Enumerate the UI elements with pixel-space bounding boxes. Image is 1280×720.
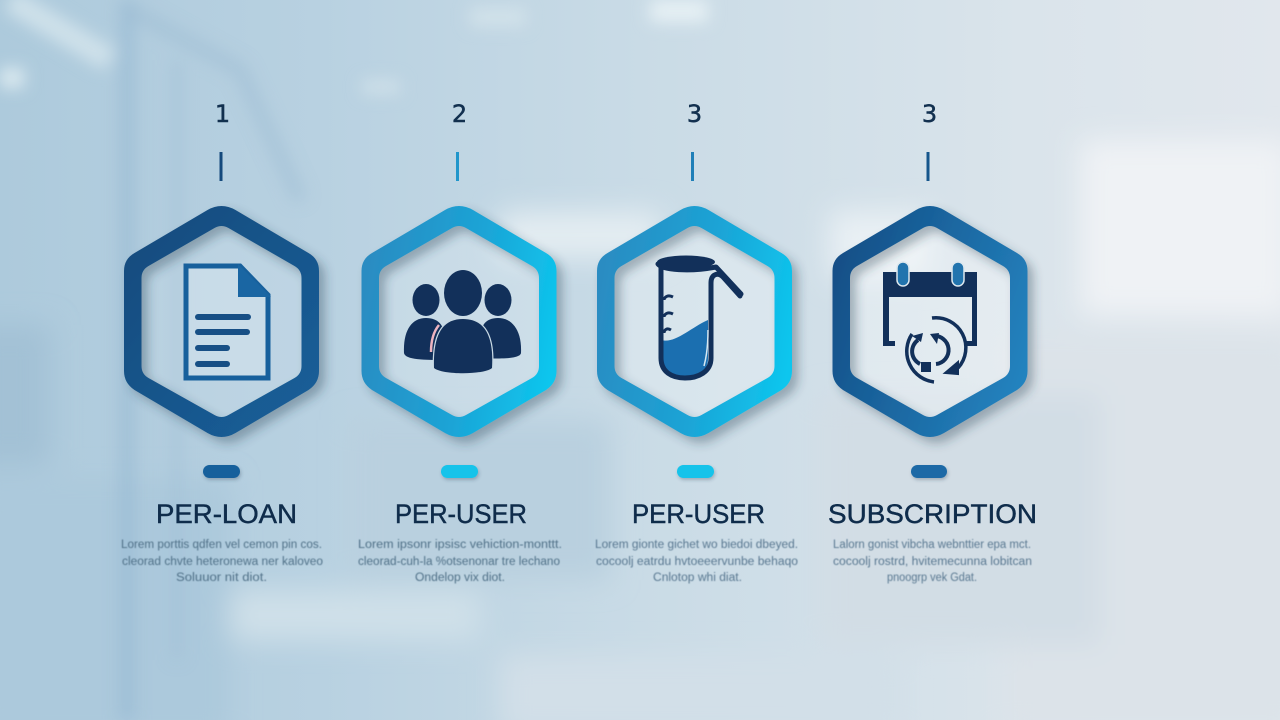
- description 2: Ondelop vix diot.: [415, 572, 505, 584]
- description 4: [833, 539, 1032, 584]
- description 2: Lorem ipsonr ipsisc vehiction-monttt.: [358, 539, 562, 551]
- description 1: Soluuor nit diot.: [176, 572, 267, 584]
- heading 4: SUBSCRIPTION: [828, 499, 1037, 529]
- number 1: 1: [215, 100, 230, 128]
- description 3: [595, 539, 798, 584]
- description 2: [358, 539, 562, 584]
- icon: beaker: [657, 256, 741, 378]
- description 4: cocoolj rostrd, hvitemecunna lobitcan: [833, 556, 1032, 568]
- hexagon 4: [832, 206, 1028, 437]
- pill 3: [677, 465, 714, 478]
- hexagon 1: [124, 206, 319, 437]
- number 3 (fourth column): 3: [922, 100, 937, 128]
- icon: people: [404, 270, 521, 373]
- heading 1: PER-LOAN: [156, 499, 297, 529]
- number 2: 2: [452, 100, 467, 128]
- pill 2: [441, 465, 478, 478]
- icon: document: [186, 264, 271, 378]
- hexagon 3: [597, 206, 792, 437]
- tick 1: [220, 152, 222, 181]
- description 3: Cnlotop whi diat.: [653, 572, 742, 584]
- number 3: 3: [687, 100, 702, 128]
- column 3: per-user: [595, 100, 798, 584]
- description 1: [121, 539, 323, 584]
- description 4: Lalorn gonist vibcha webnttier epa mct.: [833, 539, 1031, 551]
- hexagon 2: [362, 206, 556, 437]
- pill 1: [203, 465, 240, 478]
- tick 4: [926, 152, 930, 181]
- column 1: per-loan: [121, 100, 323, 584]
- column 4: subscription: [828, 100, 1037, 584]
- description 4: pnoogrp vek Gdat.: [887, 572, 977, 584]
- pill 4: [911, 465, 947, 478]
- tick 2: [456, 152, 459, 181]
- icon: calendar with cycle arrows: [883, 262, 977, 382]
- description 3: cocoolj eatrdu hvtoeeervunbe behaqo: [596, 556, 798, 568]
- heading 2: PER-USER: [395, 499, 527, 529]
- column 2: per-user: [358, 100, 562, 584]
- tick 3: [691, 152, 694, 181]
- description 2: cleorad-cuh-la %otsenonar tre lechano: [358, 556, 560, 568]
- description 3: Lorem gionte gichet wo biedoi dbeyed.: [595, 539, 798, 551]
- heading 3: PER-USER: [632, 499, 765, 529]
- description 1: Lorem porttis qdfen vel cemon pin cos.: [121, 539, 322, 551]
- description 1: cleorad chvte heteronewa ner kaloveo: [122, 556, 323, 568]
